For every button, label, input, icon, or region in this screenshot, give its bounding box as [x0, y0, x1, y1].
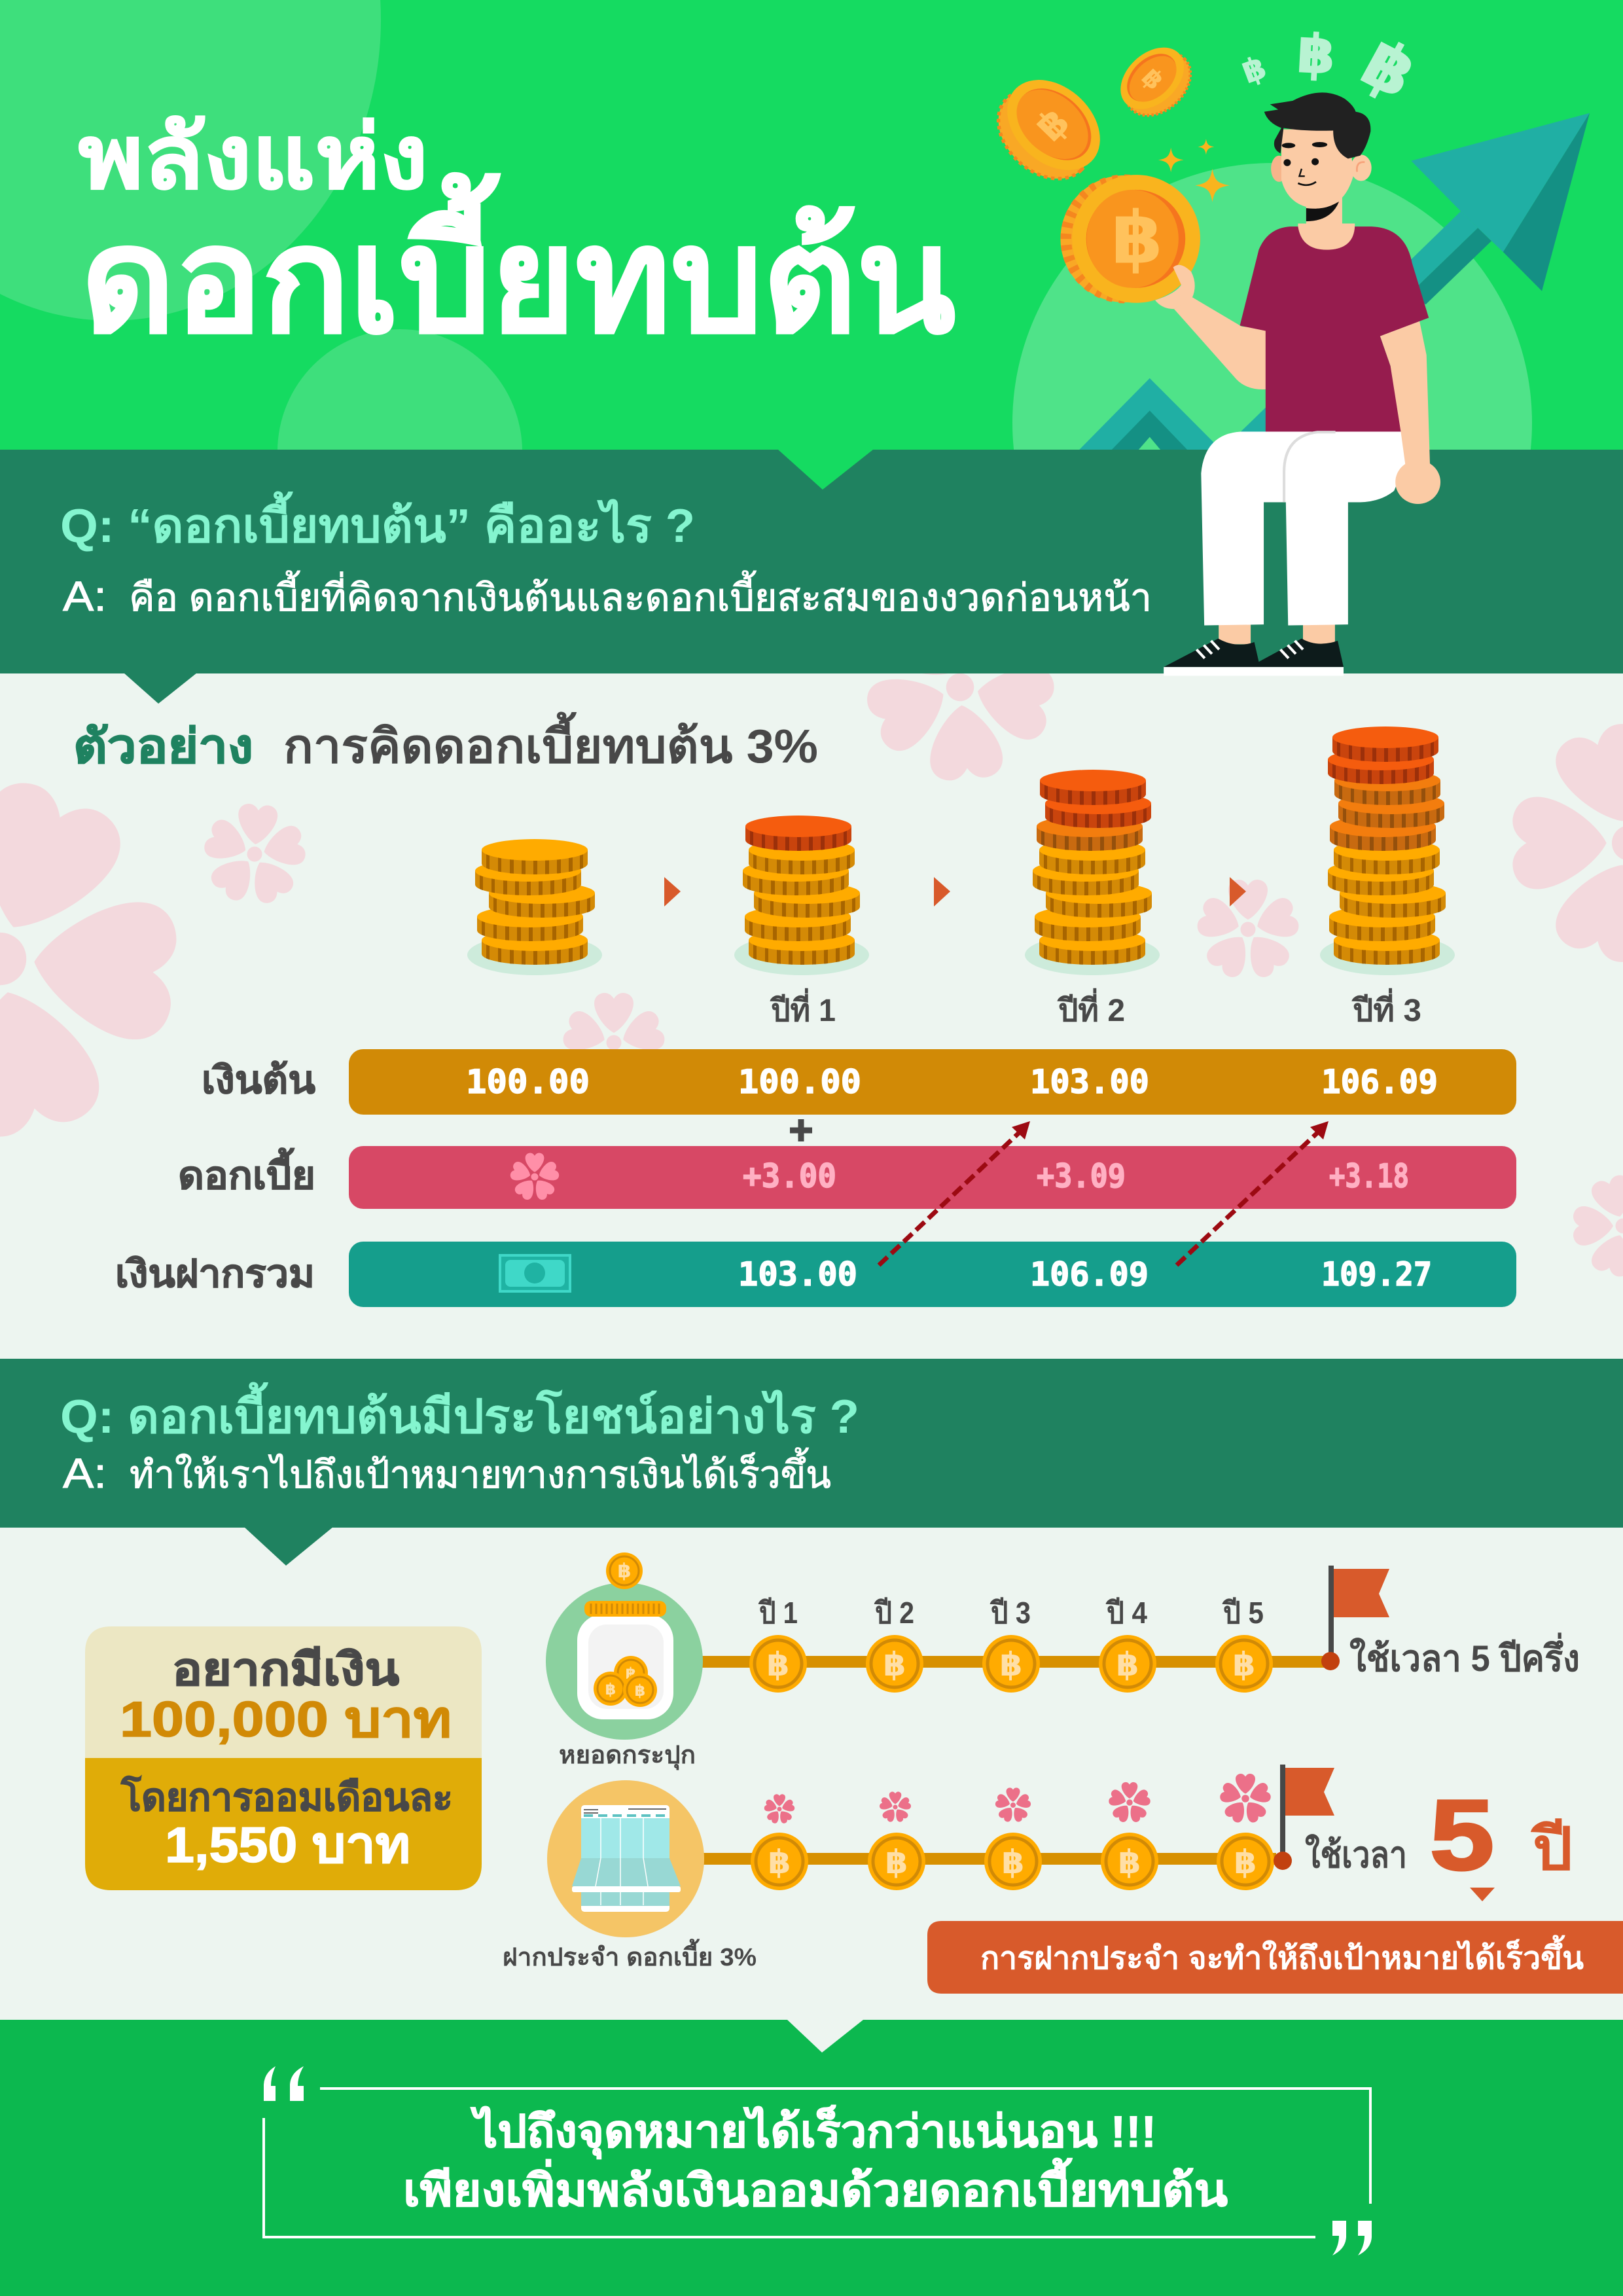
decoration: pale blossoms [0, 583, 1623, 1280]
table: principal row: 103.00 [1030, 1063, 1149, 1101]
callout: conclusion: การฝากประจำ จะทำให้ถึงเป้าหมายได้เร็วขึ้น [980, 1935, 1584, 1976]
table: interest row: ดอกเบี้ย [178, 1148, 315, 1197]
table: principal row: เงินต้น [202, 1059, 315, 1102]
label: uses five years: ใช้เวลา [1305, 1833, 1407, 1875]
table: total row: 109.27 [1321, 1255, 1432, 1293]
label: fixed deposit: ฝากประจำ ดอกเบี้ย 3% [503, 1939, 757, 1971]
icon: passbook [547, 1780, 704, 1937]
small coin [1108, 35, 1203, 128]
illustration: coins and sparkles [980, 23, 1429, 303]
panel: question two band [0, 1359, 1623, 1566]
year labels [770, 988, 1421, 1028]
table: interest row: +3.18 [1329, 1157, 1409, 1195]
table: principal row [202, 1049, 1516, 1115]
medium coin [980, 62, 1118, 197]
arrow: second total to next principal [1177, 1121, 1329, 1265]
table: total row: เงินฝากรวม [115, 1253, 315, 1295]
table: principal row: 106.09 [1321, 1063, 1438, 1101]
title: ดอกเบี้ยทบต้น [81, 173, 955, 363]
table: total row: 103.00 [738, 1255, 857, 1293]
label: five and a half years: ใช้เวลา 5 ปีครึ่ง [1349, 1632, 1580, 1679]
label: piggy bank: หยอดกระปุก [559, 1742, 696, 1770]
panel: footer [0, 2020, 1623, 2296]
floating baht symbols: ฿ [1349, 24, 1429, 113]
answer two text: A: [63, 1450, 107, 1497]
timeline: five year coins [749, 1635, 1273, 1693]
timeline: year labels: ปี 4 [1105, 1596, 1147, 1630]
sparkles [1158, 139, 1230, 202]
table: interest row: +3.00 [743, 1157, 836, 1195]
answer one text: คือ ดอกเบี้ยที่คิดจากเงินต้นและดอกเบี้ยสะสมของงวดก่อนหน้า [129, 571, 1152, 619]
big coin: ฿ [1111, 196, 1163, 280]
year labels: ปีที่ 3 [1351, 988, 1421, 1028]
chart: coin stack start [467, 839, 602, 975]
footer message: ไปถึงจุดหมายได้เร็วกว่าแน่นอน !!! [471, 2105, 1156, 2159]
timeline: piggy bank line [694, 1656, 1329, 1668]
chart: coin stack year 2 [1025, 770, 1160, 975]
panel: savings goal box: อยากมีเงิน [172, 1645, 399, 1695]
table: plus sign [790, 1119, 812, 1141]
floating baht symbols [1237, 23, 1429, 113]
panel: header [0, 0, 1623, 450]
table: interest row [178, 1146, 1516, 1209]
icon: goal flag one [1321, 1566, 1389, 1670]
icon: coin jar [546, 1552, 703, 1740]
table: total row [115, 1242, 1516, 1307]
footer message [403, 2105, 1228, 2215]
panel: question one band [0, 450, 1623, 704]
label: uses five years: ปี [1530, 1817, 1573, 1882]
timeline: year labels [758, 1596, 1264, 1630]
heading: example [73, 711, 818, 773]
icon: rising arrow background [1078, 113, 1590, 452]
callout: conclusion [927, 1921, 1623, 1994]
big coin [1060, 175, 1200, 303]
question one text: Q: “ดอกเบี้ยทบต้น” คืออะไร ? [60, 491, 695, 552]
icon: opening quote [264, 2066, 304, 2101]
timeline: deposit line [694, 1853, 1276, 1865]
icon: banknote [499, 1254, 571, 1293]
timeline: growing blossoms [764, 1774, 1272, 1825]
medium coin: ฿ [1027, 99, 1079, 151]
table: interest row: +3.09 [1037, 1157, 1126, 1195]
answer one text: A: [63, 573, 107, 620]
question two text: Q: ดอกเบี้ยทบต้นมีประโยชน์อย่างไร ? [60, 1382, 859, 1443]
arrows between stacks [664, 877, 1246, 906]
year labels: ปีที่ 1 [770, 988, 836, 1028]
floating baht symbols: ฿ [1237, 48, 1271, 91]
panel: savings goal box: 1,550 บาท [165, 1818, 410, 1873]
label: uses five years: 5 [1430, 1780, 1494, 1891]
title: พลังแห่ง [79, 108, 428, 207]
timeline: year labels: ปี 3 [990, 1596, 1031, 1630]
timeline: five year coins with interest [751, 1833, 1274, 1890]
callout pointer [1470, 1888, 1495, 1901]
timeline: year labels: ปี 1 [758, 1596, 798, 1630]
year labels: ปีที่ 2 [1057, 988, 1125, 1028]
chart: coin stack year 1 [734, 816, 869, 975]
timeline: year labels: ปี 2 [874, 1596, 914, 1630]
illustration: man sitting [1155, 92, 1440, 676]
label: uses five years [1305, 1780, 1573, 1891]
table: principal row: 100.00 [466, 1063, 590, 1101]
quote frame [264, 2089, 1370, 2237]
icon: coin jar: ฿ [618, 1560, 631, 1583]
chart: coin stack year 3 [1320, 726, 1455, 975]
title [79, 108, 955, 363]
answer two text: ทำให้เราไปถึงเป้าหมายทางการเงินได้เร็วขึ้น [130, 1448, 831, 1496]
heading: example: การคิดดอกเบี้ยทบต้น 3% [283, 711, 818, 773]
table: principal row: 100.00 [738, 1063, 861, 1101]
small coin: ฿ [1135, 62, 1170, 96]
table: total row: 106.09 [1030, 1255, 1149, 1293]
icon: goal flag two [1274, 1765, 1334, 1870]
arrow: total to next principal [879, 1121, 1030, 1265]
icon: closing quote [1332, 2221, 1372, 2255]
timeline: year labels: ปี 5 [1222, 1596, 1264, 1630]
panel: savings goal box [85, 1626, 482, 1890]
panel: savings goal box: 100,000 บาท [120, 1692, 452, 1748]
floating baht symbols: ฿ [1296, 23, 1336, 86]
footer message: เพียงเพิ่มพลังเงินออมด้วยดอกเบี้ยทบต้น [403, 2157, 1228, 2215]
heading: example: ตัวอย่าง [73, 721, 253, 773]
panel: savings goal box: โดยการออมเดือนละ [120, 1774, 453, 1819]
